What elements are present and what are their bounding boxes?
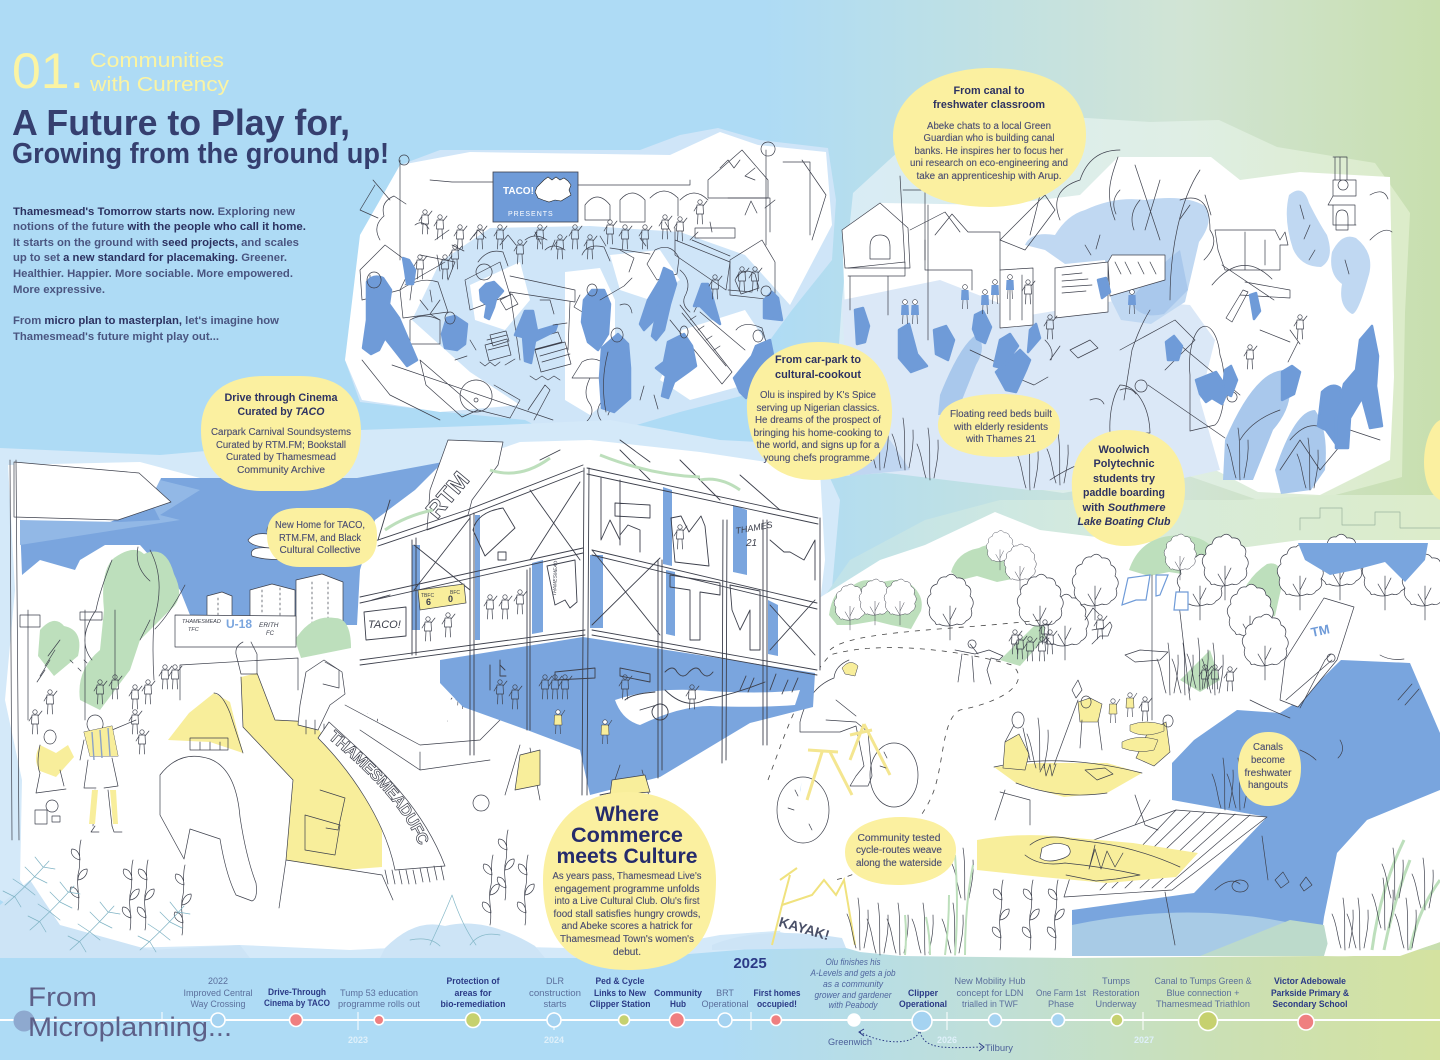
timeline year labels: 2024	[544, 1035, 564, 1045]
timeline labels: Parkside Primary &	[1271, 988, 1349, 998]
callout: Woolwich Polytechnic: students try	[1093, 473, 1156, 485]
waterside reed bank	[1157, 638, 1223, 695]
intro text: Thamesmead's Tomorrow starts now. Exploring new	[13, 206, 295, 218]
callout: cycle routes: along the waterside	[856, 858, 942, 869]
callout: car-park to cookout: He dreams of the prospect of	[755, 415, 881, 426]
building signs	[368, 520, 773, 631]
callout: car-park to cookout: From car-park to	[775, 354, 861, 366]
callout: canals: become	[1251, 755, 1285, 766]
callout: drive through cinema: Drive through Cinema	[224, 392, 338, 404]
callout: Woolwich Polytechnic	[1072, 430, 1185, 546]
callout: Woolwich Polytechnic: with Southmere	[1081, 502, 1166, 514]
RTM tower banner	[421, 440, 503, 530]
callout: canal to classroom: banks. He inspires her to focus her	[914, 146, 1064, 157]
market figure outlines	[367, 272, 771, 412]
dock and kayak 2	[1064, 810, 1267, 897]
timeline labels: Way Crossing	[190, 999, 246, 1009]
timeline labels: Improved Central	[184, 988, 252, 998]
timeline labels: Links to New	[594, 988, 647, 998]
intro text: up to set a new standard for placemaking. Greener.	[13, 252, 287, 264]
sky	[20, 462, 443, 625]
park trees	[20, 545, 190, 740]
timeline labels: with Peabody	[828, 1000, 878, 1010]
callout: drive through cinema	[201, 376, 361, 491]
wall banner U-18: FC	[266, 631, 275, 637]
kayak 1 with carriers	[994, 763, 1142, 797]
callout: drive through cinema: Carpark Carnival Soundsystems	[211, 427, 351, 438]
callout: car-park to cookout: serving up Nigerian classics.	[756, 403, 880, 414]
callout: canals	[1238, 732, 1301, 806]
timeline labels: First homes	[754, 988, 800, 998]
callout: Woolwich Polytechnic: Lake Boating Club	[1078, 516, 1171, 528]
callout: canals: Canals	[1253, 742, 1283, 753]
billboard: TACO!	[503, 186, 534, 197]
callout: canal to classroom: freshwater classroom	[933, 99, 1045, 111]
timeline axis and ticks	[0, 1012, 1440, 1030]
callout: floating reed beds: Floating reed beds built	[950, 409, 1052, 420]
callout: drive through cinema: Curated by RTM.FM; Bookstall	[216, 440, 346, 451]
timeline labels: Olu finishes his	[826, 957, 881, 967]
scene halo	[830, 118, 1410, 500]
callout: where commerce meets culture: engagement programme unfolds	[554, 884, 700, 895]
roof grass	[385, 455, 740, 530]
callout: canal to classroom: take an apprenticeship with Arup.	[916, 171, 1062, 182]
classroom people	[855, 278, 1382, 448]
callout: where commerce meets culture: debut.	[613, 947, 641, 958]
yellow hair	[168, 693, 243, 753]
timeline labels: construction	[529, 988, 581, 998]
score board: 6	[426, 597, 431, 607]
intro text: Thamesmead's future might play out...	[13, 331, 219, 343]
callout: canals: freshwater	[1244, 768, 1292, 779]
timeline labels: Thamesmead Triathlon	[1156, 999, 1250, 1009]
callout: where commerce meets culture	[543, 792, 716, 970]
distant skyline	[1300, 508, 1440, 530]
scene halo	[345, 128, 836, 445]
supporters in foreground	[160, 642, 446, 908]
illustration: drive-through market scene	[345, 128, 836, 445]
place labels: Greenwich	[828, 1037, 872, 1047]
windsurfer sail	[1280, 598, 1354, 707]
intro text: notions of the future with the people who call it home.	[13, 221, 306, 233]
callout: new home	[267, 508, 377, 567]
billboard	[493, 172, 578, 222]
callout: drive through cinema: Curated by Thamesmead	[226, 452, 336, 463]
timeline year labels: 2023	[348, 1035, 368, 1045]
small classroom figures	[901, 275, 1307, 369]
callout: floating reed beds	[938, 394, 1060, 457]
callout: canal to classroom: uni research on eco-engineering and	[910, 158, 1068, 169]
timeline labels: New Mobility Hub	[954, 976, 1026, 986]
intro text: Healthier. Happier. More sociable. More empowered.	[13, 268, 293, 280]
timeline labels: as a community	[823, 979, 883, 989]
title block	[12, 43, 389, 170]
kayak sign	[772, 868, 855, 945]
timeline labels: Phase	[1048, 999, 1074, 1009]
timeline labels: Canal to Tumps Green &	[1154, 976, 1252, 986]
title block: with Currency	[89, 74, 229, 96]
callout: where commerce meets culture: As years pass, Thamesmead Live's	[552, 871, 702, 882]
water	[1072, 543, 1440, 956]
building signs: TACO!	[368, 619, 401, 631]
section name: Communities	[90, 50, 224, 72]
timeline labels: Ped & Cycle	[596, 976, 644, 986]
timeline milestone dots	[211, 1011, 1314, 1031]
football players	[35, 715, 136, 832]
courtyard path	[615, 690, 800, 725]
timeline year labels: 2026	[937, 1035, 957, 1045]
white coat figure	[160, 756, 256, 901]
hub people	[422, 525, 699, 744]
flag	[10, 460, 171, 840]
sub heading: Growing from the ground up!	[12, 138, 389, 170]
callout: car-park to cookout: young chefs programme.	[764, 453, 872, 464]
water details	[1215, 654, 1419, 892]
callout: car-park to cookout: Olu is inspired by K's Spice	[760, 390, 876, 401]
timeline labels: Victor Adebowale	[1274, 976, 1346, 986]
footer heading: from microplanning: From	[28, 982, 97, 1012]
timeline labels: grower and gardener	[814, 990, 892, 1000]
timeline labels: Hub	[670, 999, 686, 1009]
timeline band background	[0, 950, 1440, 1060]
callout: cycle routes	[845, 817, 956, 885]
callout: new home: Cultural Collective	[280, 545, 361, 556]
ball and plants	[473, 795, 489, 811]
wall banner U-18	[175, 615, 296, 647]
yellow jacket	[241, 673, 382, 870]
callout: where commerce meets culture: Thamesmead Town's women's	[560, 934, 694, 945]
illustration: canal classroom scene	[830, 118, 1410, 500]
timeline labels: areas for	[454, 988, 492, 998]
intro text	[13, 206, 306, 343]
intro text: From micro plan to masterplan, let's imagine how	[13, 315, 279, 327]
upper floor panels	[360, 468, 820, 672]
callout: right edge bubble	[1424, 420, 1440, 500]
score board: TBFC	[421, 593, 434, 599]
callout: where commerce meets culture: meets Culture	[556, 845, 698, 868]
timeline labels: Clipper Station	[590, 999, 650, 1009]
callout: floating reed beds: with elderly residents	[953, 422, 1048, 433]
timeline year labels: 2027	[1134, 1035, 1154, 1045]
callout: where commerce meets culture: into a Live Cultural Club. Olu's first	[554, 896, 700, 907]
market line work	[360, 142, 826, 424]
timeline labels: Underway	[1096, 999, 1137, 1009]
building signs: 21	[745, 538, 757, 549]
market people	[363, 258, 782, 412]
illustration: football pitch scene	[0, 420, 840, 958]
building signs: THAMESMEAD	[552, 560, 559, 596]
callout: car-park to cookout: cultural-cookout	[775, 369, 861, 381]
footer heading: from microplanning: Microplanning...	[28, 1012, 232, 1042]
small market figures	[414, 200, 762, 299]
timeline labels: Restoration	[1092, 988, 1140, 998]
main heading: A Future to Play for,	[12, 102, 350, 143]
callout: car-park to cookout: the world, and signs up for a	[756, 440, 880, 451]
callout: car-park to cookout	[747, 342, 892, 480]
hood and cap	[298, 660, 345, 730]
RTM tower banner: RTM	[421, 467, 475, 524]
callout: cycle routes: Community tested	[858, 833, 940, 844]
timeline labels: bio-remediation	[440, 999, 506, 1009]
timeline year labels	[348, 955, 1154, 1045]
scarf	[318, 722, 445, 870]
timeline labels: Operational	[702, 999, 748, 1009]
timeline labels: trialled in TWF	[962, 999, 1018, 1009]
timeline labels: programme rolls out	[338, 999, 421, 1009]
callout: canals: hangouts	[1248, 780, 1288, 791]
callout: canal to classroom: From canal to	[954, 85, 1025, 97]
classroom line work	[842, 150, 1392, 480]
timeline labels: Drive-Through	[268, 987, 326, 997]
callout: car-park to cookout: bringing his home-cooking to	[754, 428, 883, 439]
timeline labels: DLR	[546, 976, 564, 986]
building signs: THAMES	[735, 520, 773, 536]
timeline labels: occupied!	[757, 999, 797, 1009]
callout: cycle routes: cycle-routes weave	[856, 845, 942, 856]
timeline labels: Cinema by TACO	[264, 998, 330, 1008]
building frame	[360, 440, 820, 795]
wall banner U-18: ERITH	[259, 622, 279, 629]
footer heading: from microplanning	[14, 982, 232, 1042]
horse rider and walkers	[955, 608, 1112, 684]
callout: drive through cinema: Curated by TACO	[238, 406, 325, 418]
intro text: It starts on the ground with seed projects, and scales	[13, 237, 299, 249]
A-frame signs	[505, 745, 650, 800]
white paper areas	[345, 132, 832, 415]
timeline labels: 2022	[208, 976, 228, 986]
place labels	[828, 1037, 1014, 1053]
section number: 01.	[12, 43, 84, 99]
wall banner U-18: THAMESMEAD	[182, 619, 221, 625]
green halo	[815, 495, 1440, 620]
timeline labels: starts	[544, 999, 567, 1009]
pale water shallows	[1072, 912, 1319, 956]
timeline labels: Community	[654, 988, 702, 998]
illustration: waterside park scene	[712, 495, 1440, 958]
supporters in foreground: THAMESMEADUFC	[330, 729, 428, 844]
dashed cycle path	[768, 620, 1040, 880]
place labels: Tilbury	[985, 1043, 1014, 1053]
dotted arrows to Greenwich and Tilbury	[859, 1029, 984, 1051]
riverside reeds	[852, 395, 1318, 490]
white ground	[780, 512, 1440, 958]
callout: drive through cinema: Community Archive	[237, 465, 325, 476]
foreground reeds and plants	[847, 718, 1064, 955]
timeline labels: Tump 53 education	[340, 988, 418, 998]
building blue strips	[412, 487, 778, 656]
timeline labels: concept for LDN	[956, 988, 1024, 998]
tower blocks	[207, 574, 343, 640]
callout: canal to classroom	[893, 68, 1086, 207]
wisps: cloud	[248, 514, 320, 560]
green tree washes	[829, 535, 1283, 692]
white ground	[5, 440, 830, 950]
callout: where commerce meets culture: food stall satisfies hungry crowds,	[554, 909, 700, 920]
wall banner U-18: TFC	[188, 627, 199, 633]
trees	[834, 531, 1440, 680]
timeline labels: Secondary School	[1272, 999, 1348, 1009]
pale ground	[842, 280, 1220, 490]
score board	[418, 584, 466, 610]
callout: where commerce meets culture: Commerce	[571, 824, 683, 847]
timeline labels: Blue connection +	[1166, 988, 1240, 998]
illustration: waterside park scene: TM	[1310, 621, 1331, 640]
callout: where commerce meets culture: Where	[595, 803, 659, 826]
callout: new home: New Home for TACO,	[275, 520, 365, 531]
illustration: cultural hub building	[360, 440, 820, 800]
timeline labels: Protection of	[446, 976, 500, 986]
scene halo	[0, 420, 840, 958]
score board: BFC	[450, 590, 460, 596]
signpost and flags	[1125, 575, 1190, 720]
callout: Woolwich Polytechnic: Polytechnic	[1094, 458, 1154, 470]
callout: Woolwich Polytechnic: paddle boarding	[1083, 487, 1165, 499]
timeline labels: Tumps	[1102, 976, 1131, 986]
reeds right	[1324, 800, 1440, 956]
terrace below building left	[360, 652, 463, 740]
timeline year labels: 2025	[733, 955, 767, 972]
callout: Woolwich Polytechnic: Woolwich	[1098, 444, 1150, 456]
pale shallows behind kayak sign	[712, 933, 846, 950]
callout: canal to classroom: Abeke chats to a local Green	[927, 121, 1051, 132]
timeline labels: BRT	[716, 988, 734, 998]
callout: floating reed beds: with Thames 21	[965, 434, 1036, 445]
intro text: More expressive.	[13, 284, 105, 296]
timeline	[0, 955, 1440, 1053]
ground floor blue	[440, 637, 815, 795]
callout: where commerce meets culture: and Abeke scores a hatrick for	[562, 921, 693, 932]
timeline labels: One Farm 1st	[1036, 988, 1086, 998]
figures, terrace and fans	[29, 665, 467, 754]
callout: new home: RTM.FM, and Black	[279, 533, 362, 544]
billboard: PRESENTS	[508, 211, 554, 218]
timeline labels: Operational	[899, 999, 947, 1009]
white paper area	[842, 157, 1394, 495]
wall banner U-18: U-18	[226, 617, 252, 631]
cyclist with bike	[777, 660, 918, 843]
timeline labels: A-Levels and gets a job	[810, 968, 896, 978]
score board: 0	[448, 594, 453, 604]
kayak sign: KAYAK!	[777, 914, 831, 943]
pale blue tree washes	[1025, 190, 1370, 324]
timeline labels: Clipper	[908, 988, 938, 998]
timeline labels	[184, 957, 1349, 1010]
callout: canal to classroom: Guardian who is building canal	[924, 133, 1054, 144]
